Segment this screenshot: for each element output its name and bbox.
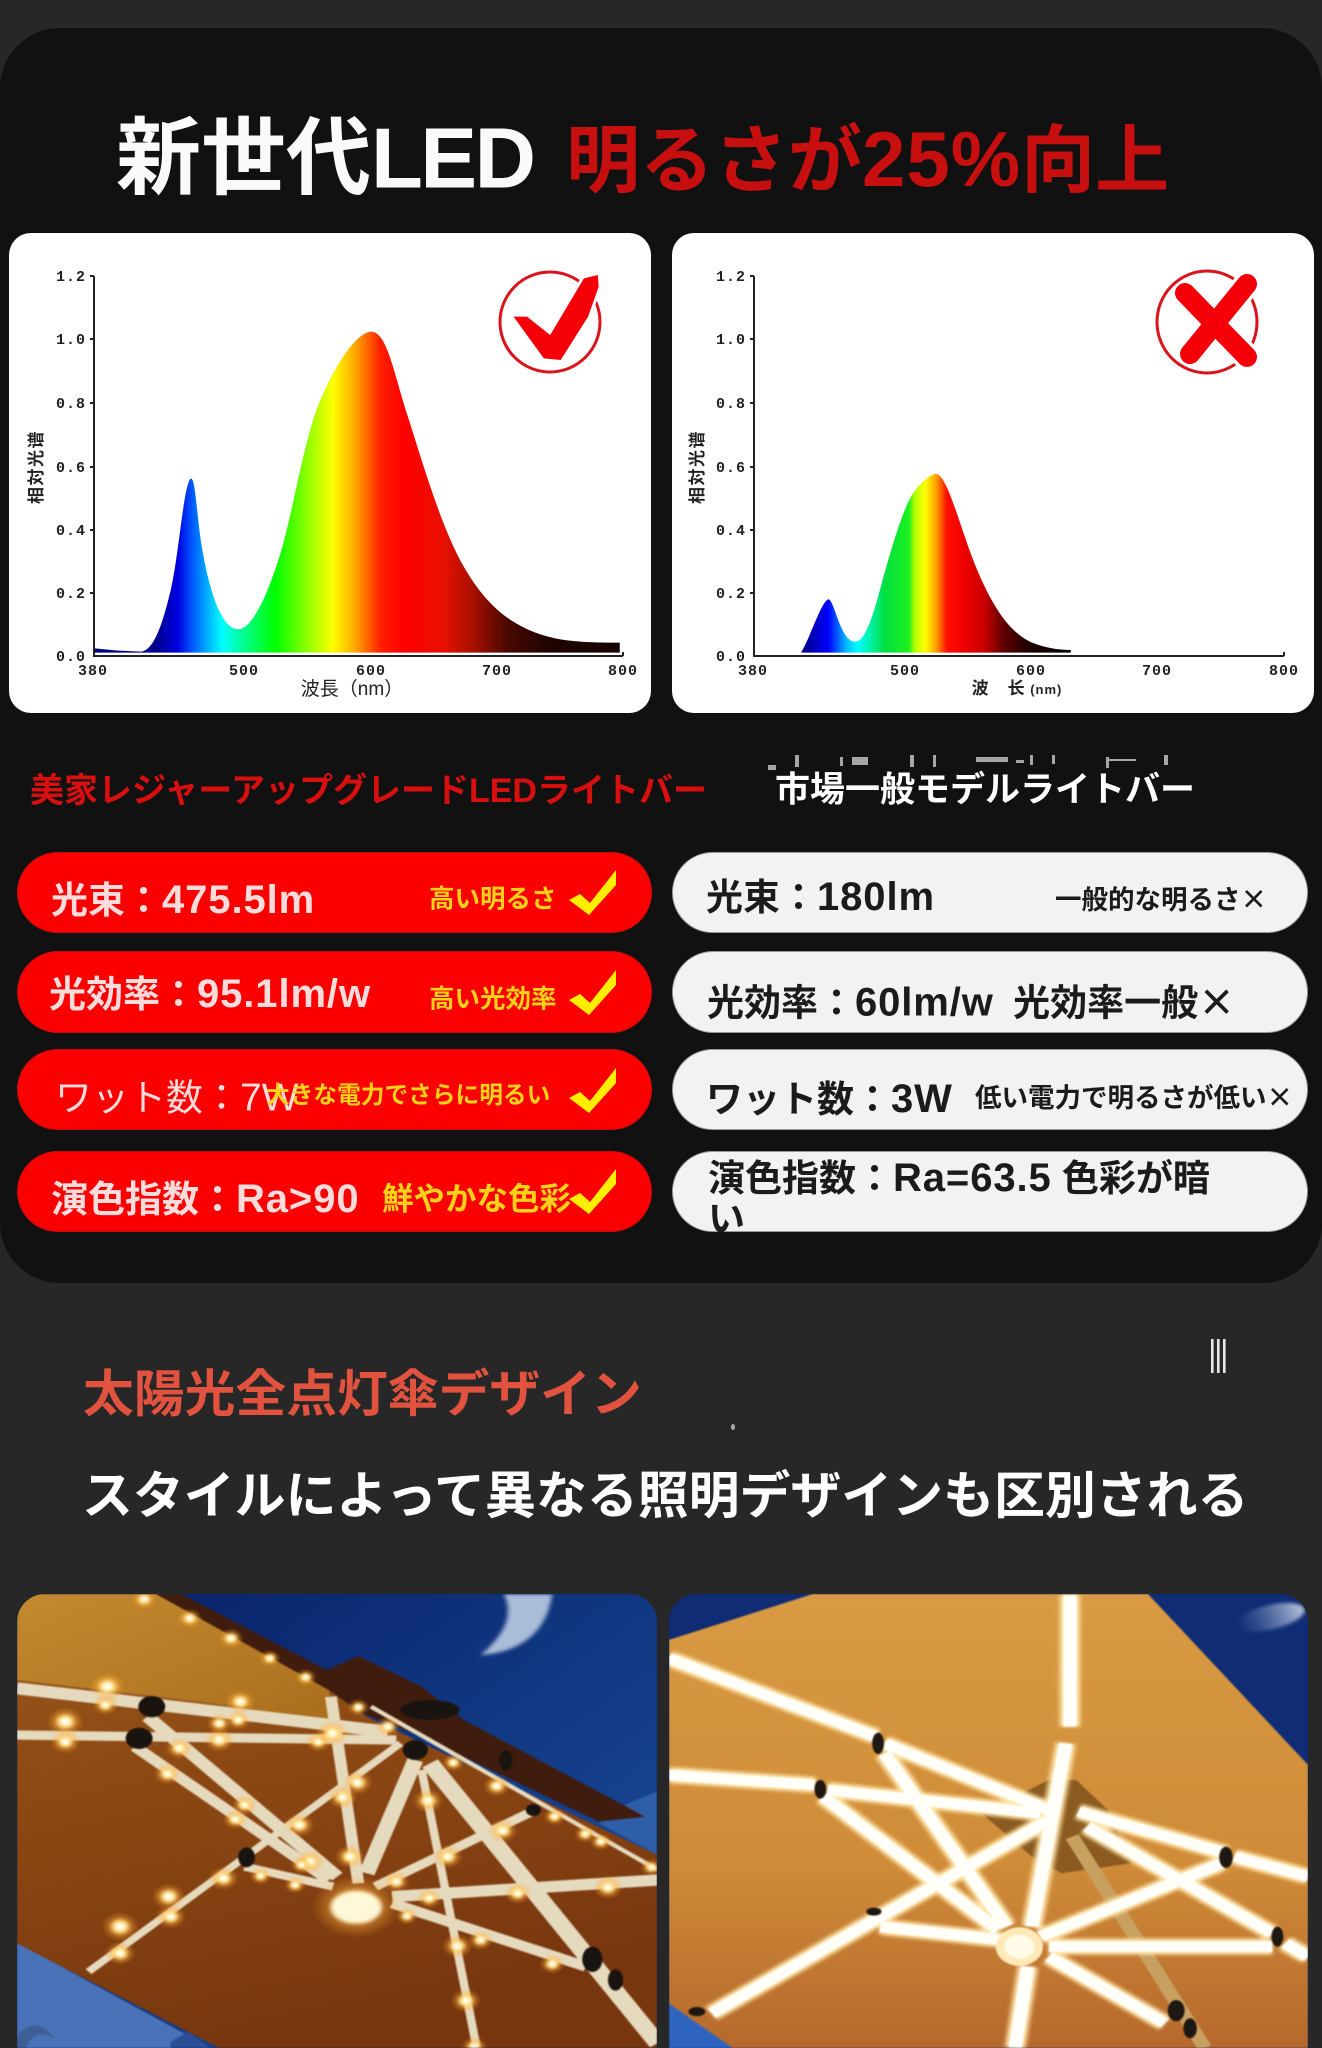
y axis tick labels: 1.0 (716, 332, 746, 349)
row: wattage, market (672, 1049, 1308, 1130)
label: ワット数：7W (55, 1076, 298, 1120)
y axis tick labels: 0.4 (56, 523, 86, 540)
heading: solar full-lit umbrella design: 太陽光全点灯傘デザイン (83, 1366, 642, 1423)
icon: red check mark (500, 272, 600, 372)
x axis tick labels: 500 (229, 663, 259, 680)
rib joints (126, 1696, 623, 1991)
row: color rendering, market (672, 1151, 1308, 1232)
row: wattage, upgraded (17, 1049, 652, 1130)
lower sky (669, 2003, 737, 2048)
y axis tick labels: 0.4 (716, 523, 746, 540)
subheading: different lighting designs: スタイルによって異なる照明デザインも区別される (82, 1468, 1248, 1525)
note: 鮮やかな色彩 (382, 1180, 571, 1216)
y axis tick labels (716, 269, 746, 666)
label: 光効率：95.1lm/w (49, 972, 371, 1016)
x axis tick labels: 600 (1016, 663, 1046, 680)
note: 一般的な明るさ× (1055, 878, 1267, 917)
light tubes (669, 1595, 1308, 2048)
x axis tick labels: 700 (1142, 663, 1172, 680)
y axis tick labels: 1.2 (56, 269, 86, 286)
chart card: upgraded LED spectrum (9, 233, 651, 713)
panel: LED comparison (0, 28, 1322, 1283)
axes (750, 276, 1284, 656)
wrapped last character: い (708, 1198, 745, 1240)
x axis tick labels (78, 663, 638, 680)
light tube halos (669, 1595, 1308, 2048)
y axis tick labels: 0.6 (56, 460, 86, 477)
label: 光束：475.5lm (51, 878, 315, 922)
title: new generation LED: 新世代LED (116, 112, 534, 206)
central hub lamp (312, 1875, 401, 1938)
moon (1231, 1597, 1309, 1637)
y axis tick labels: 0.8 (56, 396, 86, 413)
label: 光束：180lm (706, 875, 935, 919)
y axis tick labels: 0.8 (716, 396, 746, 413)
central hub (996, 1927, 1043, 1966)
row: luminous efficacy, upgraded (17, 951, 652, 1033)
ribs (17, 1688, 658, 2047)
axes (90, 276, 623, 656)
y axis title: 相対光谱 (688, 430, 707, 504)
spectrum area: market model (801, 474, 1071, 653)
dark valance (156, 1594, 645, 1822)
y axis tick labels: 1.2 (716, 269, 746, 286)
y axis tick labels: 0.2 (716, 586, 746, 603)
x axis title: 波 长 (nm) (972, 678, 1062, 698)
x axis tick labels (738, 663, 1299, 680)
row: luminous efficacy, market (672, 951, 1308, 1033)
label and note: 演色指数：Ra=63.5 色彩が暗 (708, 1156, 1210, 1200)
heading: market standard bar: 市場一般モデルライトバー (775, 770, 1195, 810)
x axis tick labels: 800 (608, 663, 638, 680)
label and note: 光効率：60lm/w 光効率一般× (707, 972, 1235, 1026)
x axis tick labels: 500 (890, 663, 920, 680)
string lights (47, 1589, 662, 2048)
center shadow (981, 1780, 1131, 1873)
row: color rendering, upgraded (17, 1151, 652, 1232)
label: ワット数：3W (706, 1077, 953, 1121)
note: 低い電力で明るさが低い× (975, 1076, 1293, 1115)
icon: yellow check (569, 870, 616, 915)
photo: umbrella with point lights (17, 1594, 657, 2048)
photo: umbrella with tube lights (669, 1594, 1308, 2048)
icon: three vertical bars (1211, 1339, 1226, 1373)
upper canopy panel (17, 1594, 333, 1722)
x axis tick labels: 380 (738, 663, 768, 680)
title: brightness up 25%: 明るさが25%向上 (566, 115, 1169, 203)
rib joints (688, 1733, 1283, 2038)
icon: yellow check (569, 970, 616, 1015)
y axis title: 相対光谱 (27, 430, 46, 504)
x axis tick labels: 380 (78, 663, 108, 680)
row: luminous flux, upgraded (17, 852, 652, 933)
icon: red cross mark (1157, 271, 1257, 373)
y axis tick labels: 0.2 (56, 586, 86, 603)
crescent moon (481, 1594, 552, 1655)
sky (661, 1580, 1322, 2048)
y axis tick labels: 0.0 (716, 649, 746, 666)
note: 高い光効率 (429, 985, 557, 1013)
pole (1072, 1837, 1205, 2048)
spectrum area: upgraded LED (94, 332, 620, 653)
x axis title: 波長（nm） (301, 678, 403, 700)
x axis tick labels: 600 (356, 663, 386, 680)
row: luminous flux, market (672, 852, 1308, 933)
canopy (669, 1594, 1308, 2048)
canopy (17, 1594, 661, 2048)
chart card: market standard spectrum (672, 233, 1314, 713)
y axis tick labels: 0.0 (56, 649, 86, 666)
x axis tick labels: 800 (1269, 663, 1299, 680)
icon: yellow check (569, 1169, 616, 1214)
x axis tick labels: 700 (482, 663, 512, 680)
y axis tick labels (56, 269, 86, 666)
night sky (0, 1580, 661, 2048)
label: 演色指数：Ra>90 (51, 1177, 359, 1221)
y axis tick labels: 1.0 (56, 332, 86, 349)
icon: yellow check (569, 1068, 616, 1113)
note: 高い明るさ (429, 885, 557, 913)
note: 大きな電力でさらに明るい (266, 1083, 550, 1109)
y axis tick labels: 0.6 (716, 460, 746, 477)
heading: upgraded LED bar: 美家レジャーアップグレードLEDライトバー (30, 772, 707, 810)
lower sky and building (0, 1790, 661, 2048)
